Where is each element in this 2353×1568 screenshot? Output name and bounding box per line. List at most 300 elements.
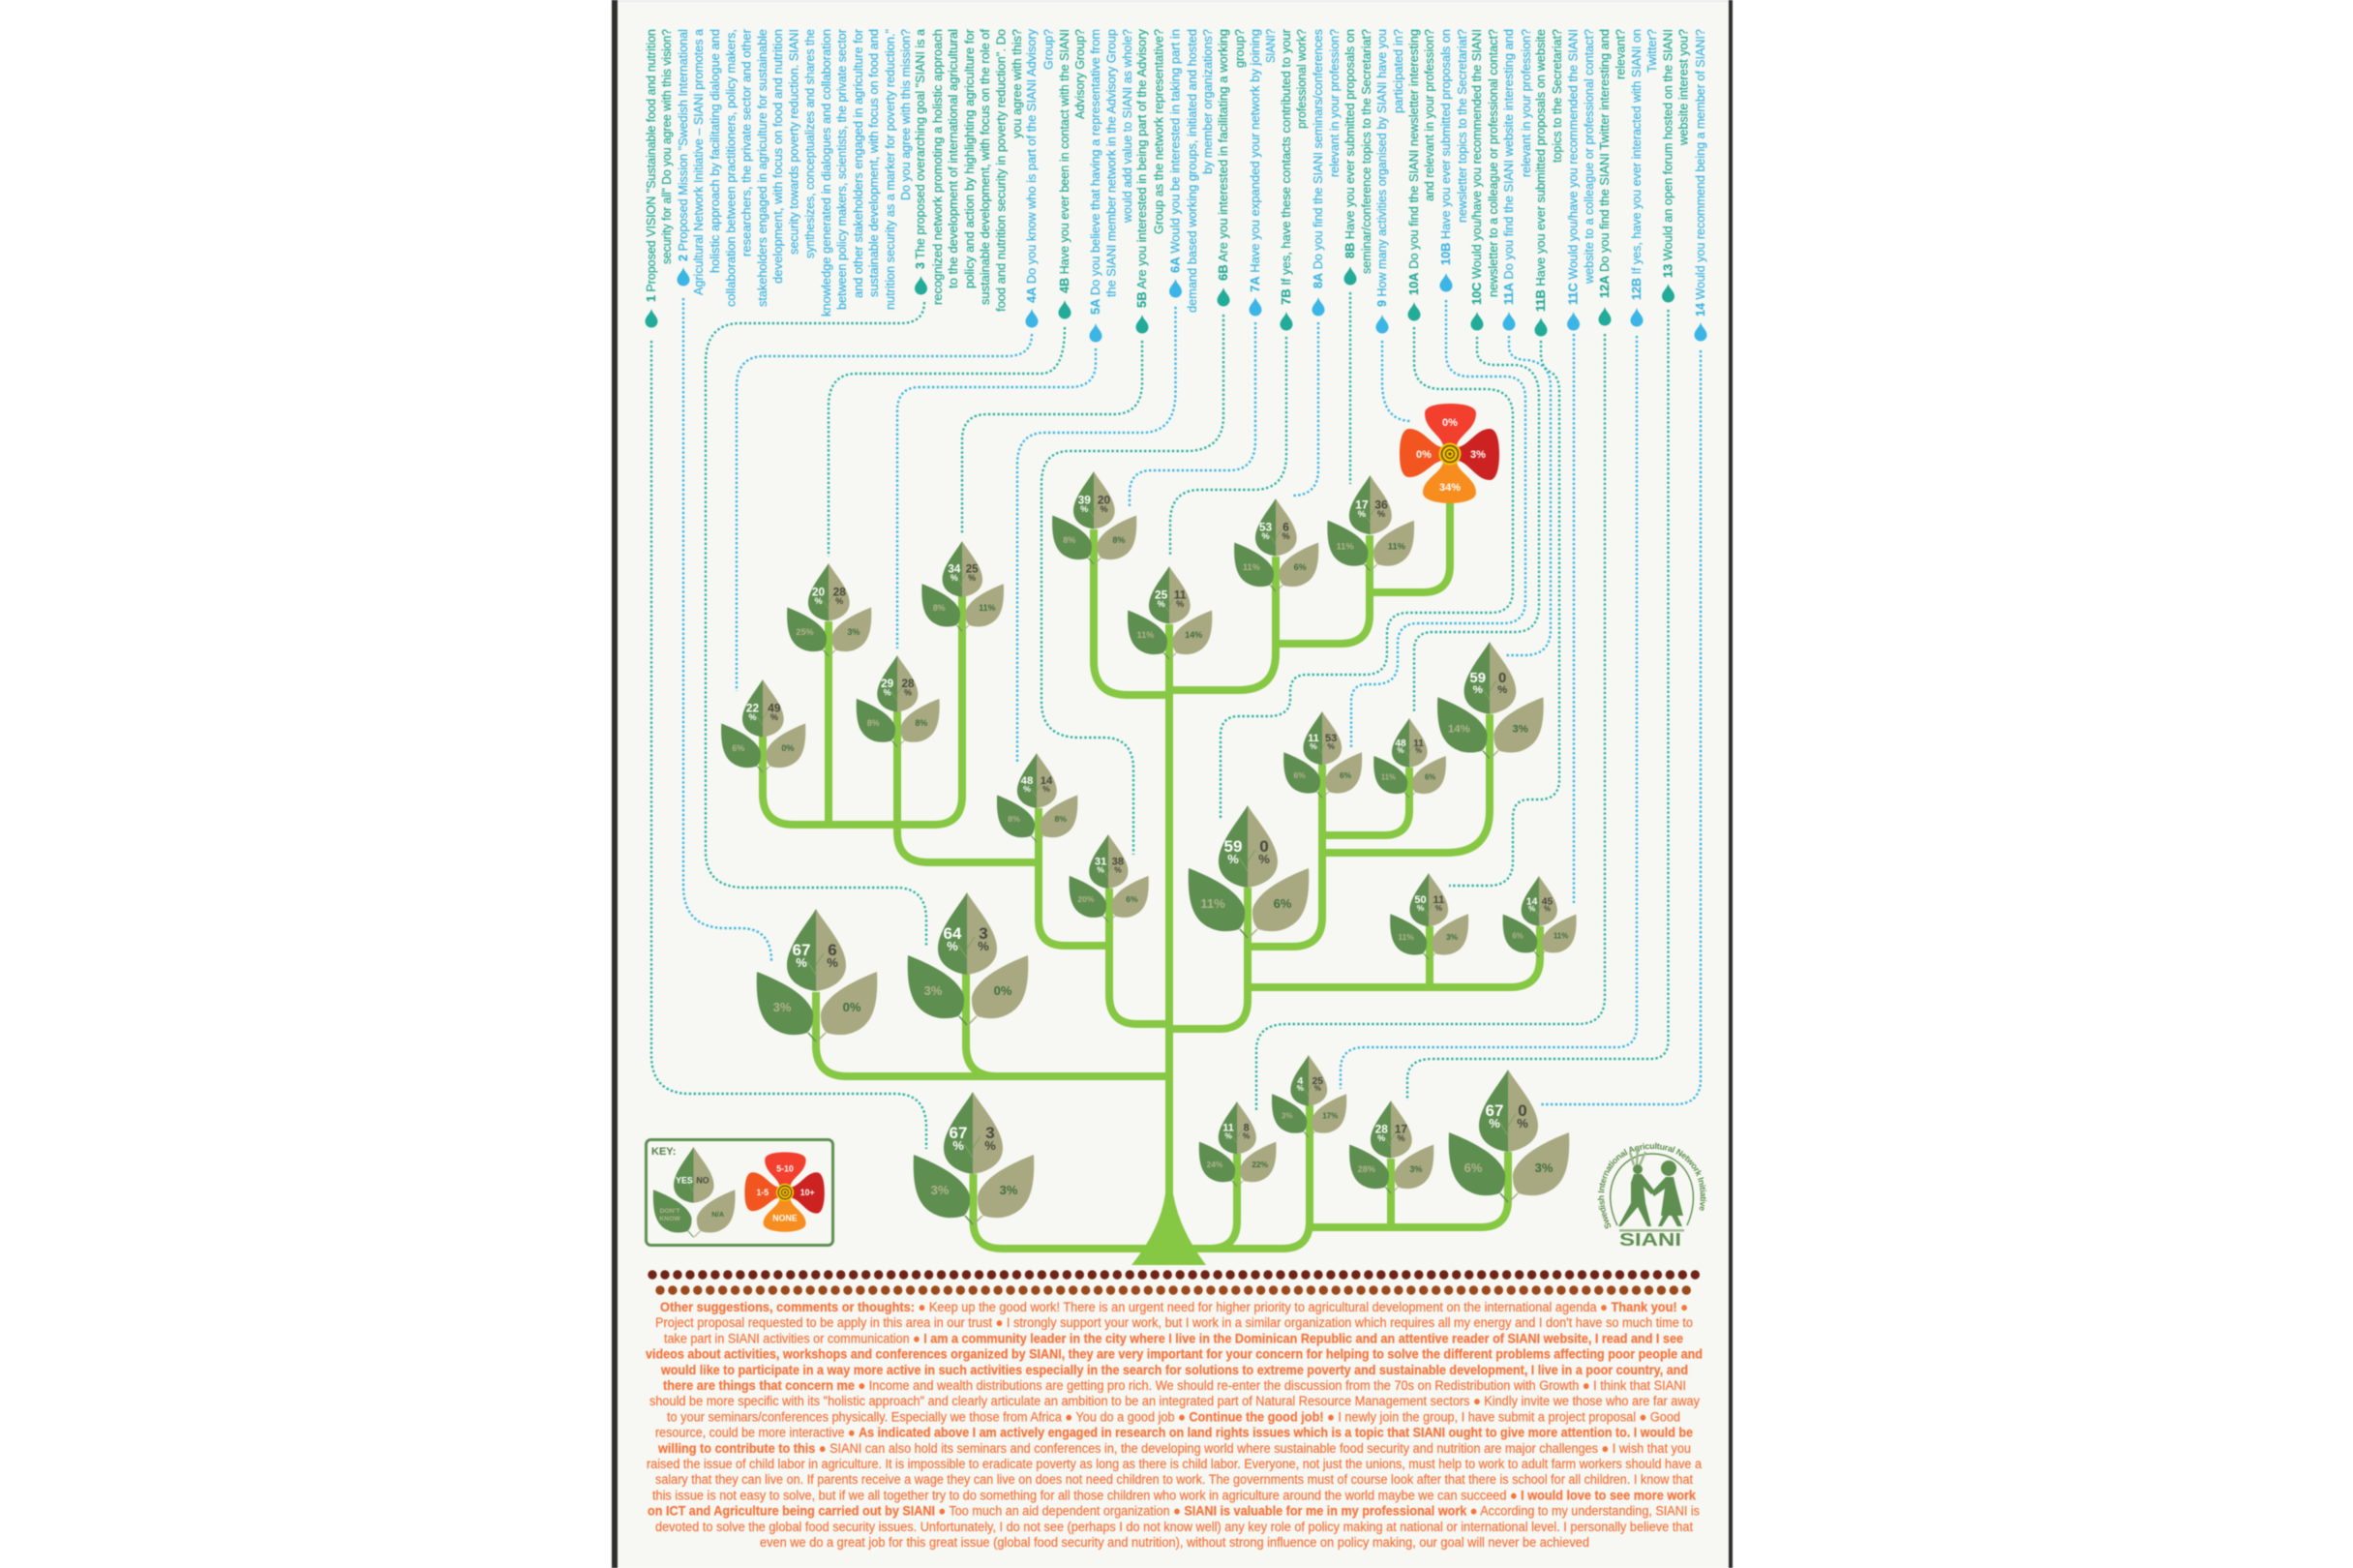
comments text block: raised the issue of child labor in agriculture. It is impossible to eradicate poverty as long as there is child labor. Everyone, not just the unions, must help to work to adult farm workers should have a [647, 1457, 1702, 1471]
question 3: food and nutrition security in poverty reduction". Do [993, 29, 1009, 312]
plant: question 11A: 3% [1512, 723, 1528, 735]
SIANI logo: SIANI [1619, 1230, 1681, 1250]
comments text block: Other suggestions, comments or thoughts: ● Keep up the good work! There is an urgent need for higher priority to agricultural development on the international agenda ● Thank you! ● [660, 1300, 1688, 1314]
comments text block: Project proposal requested to be apply in this area in our trust ● I strongly support your work, but I work in a similar organization which requires all my energy and I don't have so much time to [655, 1315, 1693, 1330]
plant: question 13: 28 [1375, 1123, 1388, 1136]
question 8A [1311, 29, 1342, 316]
plant: question 7A: 8% [1063, 535, 1075, 545]
question 10B [1438, 29, 1469, 292]
plant: question 8B: % [1377, 509, 1386, 519]
question 6A: by member organizations? [1200, 29, 1215, 174]
plant: question 14: % [1517, 1116, 1528, 1131]
connector: question 2 [683, 298, 771, 961]
plant: question 2 [757, 909, 877, 1041]
plant: question 3: 3 [979, 924, 988, 943]
plant: question 6A [997, 753, 1077, 842]
key leaf: NO [696, 1175, 709, 1185]
question 5A: the SIANI member network in the Advisory Group [1103, 29, 1119, 297]
plant: question 10B [1283, 711, 1362, 798]
plant: question 4A: % [770, 712, 778, 722]
plant: question 4A: 0% [781, 743, 794, 753]
connector: question 10A [1221, 327, 1513, 820]
question 6B [1216, 29, 1247, 306]
plant: question 12B: 3% [1282, 1112, 1293, 1121]
plant: question 12A: % [1224, 1131, 1232, 1140]
plant: question 8B: 11% [1336, 541, 1354, 551]
plant: question 3: 64 [944, 924, 962, 943]
key legend: KEY: [651, 1146, 676, 1158]
comments text block: would like to participate in a way more active in such activities especially in the search for solutions to extreme poverty and sustainable development, I live in a poor country, and [660, 1363, 1688, 1377]
comments text block: take part in SIANI activities or communication ● I am a community leader in the city where I live in the Dominican Republic and an attentive reader of SIANI website, I read and I see [664, 1331, 1683, 1345]
connector: question 5B [962, 341, 1142, 534]
plant: question 10A: % [1227, 852, 1239, 866]
question 3 [913, 28, 1024, 312]
plant: question 6B: % [1114, 865, 1122, 875]
question 10C: newsletter to a colleague or professional contact? [1486, 29, 1500, 297]
plant: question 2: % [796, 955, 807, 970]
plant: question 14: 67 [1486, 1101, 1503, 1120]
key legend [647, 1140, 832, 1245]
plant: question 11B: 3% [1446, 932, 1459, 942]
plant: question 12A: 22% [1252, 1160, 1269, 1169]
key flower: 5-10 [776, 1163, 794, 1173]
question 9: participated in? [1391, 29, 1405, 113]
plant: question 8A: 6 [1282, 521, 1289, 534]
plant: question 12A: 11 [1222, 1123, 1234, 1134]
plant: question 10C: 11 [1413, 739, 1424, 749]
plant: question 5B: 11% [979, 603, 996, 613]
plant: question 4A: 49 [768, 702, 781, 715]
question 12B [1629, 29, 1659, 327]
question 11B: topics to the Secretariat? [1550, 29, 1564, 163]
plant: question 11A: 59 [1469, 670, 1486, 686]
question 3: 3 The proposed overarching goal "SIANI is a [913, 28, 927, 269]
plant: question 5A: 8% [867, 718, 880, 728]
question 7B: 7B If yes, have these contacts contributed to your [1279, 28, 1293, 305]
question 11A: 11A Do you find the SIANI website interesting and [1501, 29, 1516, 305]
question 5B: Group as the network representative? [1152, 29, 1165, 234]
question 9: 9 How many activities organised by SIANI have you [1374, 29, 1389, 307]
key leaf: N/A [711, 1210, 725, 1219]
connector: question 7B [1170, 337, 1286, 555]
plant: question 5A: 29 [881, 678, 894, 690]
question 5A: would add value to SIANI as whole? [1120, 29, 1134, 224]
plant: question 11A: 0 [1498, 670, 1506, 686]
plant: question 5B: % [950, 573, 958, 583]
question 12A: 12A Do you find the SIANI Twitter interesting and [1597, 29, 1612, 298]
plant: question 10A: 0 [1259, 837, 1269, 856]
question 14: 14 Would you recommend being a member of SIANI? [1693, 29, 1707, 317]
connector: question 3 [706, 302, 926, 946]
question 13 [1661, 29, 1691, 302]
comments text block [646, 1300, 1703, 1550]
comments text block: resource, could be more interactive ● As indicated above I am actively engaged in research on land rights issues which is a topic that SIANI ought to give more attention to. I would be [655, 1426, 1693, 1440]
plant: question 8A: 11% [1243, 562, 1260, 572]
plant: question 10B: 53 [1325, 733, 1337, 744]
plant: question 6A: 48 [1021, 775, 1033, 787]
question 4A: 4A Do you know who is part of the SIANI Advisory [1024, 29, 1039, 303]
comments text block: on ICT and Agriculture being carried out by SIANI ● Too much an aid dependent organization ● SIANI is valuable for me in my professional work ● According to my understanding, SIANI is [648, 1504, 1700, 1519]
question 3: to the development of international agricultural [946, 29, 960, 288]
flower: question 9: 0% [1442, 417, 1458, 429]
plant: question 7A: % [1100, 504, 1108, 514]
plant: question 3: % [978, 939, 989, 953]
connector: question 10C [1414, 337, 1539, 713]
plant: question 10B: 6% [1340, 770, 1352, 780]
question 2: between policy makers, scientists, the private sector [834, 28, 849, 310]
plant: question 1: 67 [950, 1124, 967, 1142]
question 11B [1533, 29, 1564, 337]
flower: question 9: 34% [1439, 482, 1461, 494]
question 8B: 8B Have you ever submitted proposals on [1342, 29, 1357, 258]
plant: question 5B: % [968, 573, 976, 583]
question 2: and other stakeholders engaged in agriculture for [851, 28, 865, 298]
plant: question 8A: % [1282, 531, 1290, 541]
connector: question 1 [651, 341, 926, 1149]
plant: question 10C: % [1398, 746, 1404, 755]
plant: question 4B: 3% [847, 627, 860, 637]
plant: question 12B [1272, 1055, 1346, 1137]
comments text block: even we do a great job for this great issue (global food security and nutrition), without strong influence on policy making, our goal will never be achieved [760, 1535, 1589, 1550]
plant: question 10B: % [1327, 741, 1335, 751]
plant: question 12B: % [1314, 1084, 1321, 1093]
question 3: sustainable development, with focus on the role of [978, 29, 992, 305]
key leaf: DON'T [660, 1208, 680, 1215]
plant: question 5A: % [904, 687, 912, 697]
question 5A [1088, 29, 1134, 343]
comments text block: this issue is not easy to solve, but if we all together try to do something for all those children who work in agriculture around the world maybe we can succeed ● I would love to see more work [652, 1488, 1696, 1502]
plant: question 10C: 11% [1381, 773, 1396, 782]
plant: question 13: 28% [1358, 1164, 1375, 1174]
comments text block: devoted to solve the global food security issues. Unfortunately, I do not see (perhaps I do not know well) any key role of policy making at national or international level. I personally believe that [655, 1520, 1693, 1534]
plant: question 8B: 36 [1374, 498, 1388, 512]
connector: question 10B [1351, 300, 1525, 747]
question 2: sustainable development, with focus on food and [866, 29, 881, 297]
plant: question 2: 0% [843, 1000, 861, 1014]
key flower [744, 1152, 825, 1232]
plant: question 11C [1503, 876, 1577, 957]
plant: question 3 [908, 892, 1028, 1025]
question 6B: 6B Are you interested in facilitating a working [1216, 29, 1230, 281]
question 4B: Advisory Group? [1072, 29, 1087, 119]
plant: question 10C: 48 [1395, 739, 1406, 749]
plant: question 10B: 11 [1308, 733, 1319, 744]
question 7B [1279, 28, 1309, 331]
key flower: 1-5 [756, 1188, 769, 1197]
plant: question 4B: 20 [812, 586, 825, 599]
question 2: knowledge generated in dialogues and collaboration [819, 29, 833, 317]
plant: question 6B: 6% [1126, 894, 1138, 904]
plant: question 4A: 6% [732, 743, 744, 753]
dotted divider rows [652, 1275, 1696, 1290]
question 4A [1024, 29, 1055, 327]
plant: question 1: % [984, 1138, 996, 1153]
plant: question 7A [1052, 471, 1136, 564]
connector: question 8B [1349, 292, 1351, 484]
plant: question 1 [914, 1092, 1034, 1224]
plant: question 5A: 28 [902, 678, 915, 690]
question 7A: SIANI? [1263, 29, 1278, 63]
connector: question 6B [1041, 315, 1223, 855]
plant: question 3: 0% [994, 983, 1012, 998]
question 2: collaboration between practitioners, policy makers, [724, 29, 738, 307]
connector: question 11C [1573, 334, 1575, 903]
plant: question 11B: % [1417, 903, 1425, 913]
question 11A [1501, 29, 1533, 331]
plant: question 7A: 39 [1078, 494, 1091, 507]
plant: question 11C: % [1528, 905, 1535, 914]
plant: question 13: 17 [1395, 1123, 1407, 1136]
question 2: researchers, the private sector and other [739, 28, 753, 256]
question 10B: 10B Have you ever submitted proposals on [1438, 29, 1453, 265]
key flower: NONE [772, 1214, 798, 1223]
question 12B: 12B If yes, have you ever interacted with SIANI on [1629, 29, 1644, 300]
plant: question 10C [1373, 718, 1446, 798]
question 2: 2 Proposed Mission "Swedish International [676, 29, 690, 261]
plant: question 7A: 20 [1098, 494, 1110, 507]
question 11B: 11B Have you ever submitted proposals on website [1533, 29, 1548, 312]
plant: question 1: 3% [931, 1183, 950, 1197]
plant: question 4B: % [835, 596, 843, 606]
comments text block: there are things that concern me ● Income and wealth distributions are getting pro rich. We should re-enter the discussion from the 70s on Redistribution with Growth ● I think that SIANI [663, 1378, 1686, 1393]
plant: question 2: % [827, 955, 838, 970]
plant: question 6A: 8% [1054, 814, 1067, 824]
connector: question 4A [737, 334, 1032, 691]
plant: question 10B: 6% [1293, 770, 1306, 780]
question 4B: 4B Have you ever been in contact with the SIANI [1057, 29, 1071, 293]
comments text block: to your seminars/conferences physically. Especially we those from Africa ● You do a good job ● Continue the good job! ● I newly join the group, I have submit a project proposal ● Good [667, 1409, 1680, 1424]
plant: question 6A: 8% [1008, 814, 1020, 824]
question 10C [1469, 29, 1500, 331]
plant: question 7B: % [1158, 599, 1165, 609]
question 6A: demand based working groups, initiated and hosted [1185, 29, 1199, 313]
plant: question 5B [921, 541, 1004, 631]
questions column [644, 28, 1707, 343]
plant: question 5B: 8% [933, 603, 946, 613]
question 2: security towards poverty reduction. SIANI [786, 29, 801, 255]
plant: question 14: % [1489, 1116, 1500, 1131]
plant: question 8B [1327, 475, 1414, 571]
plant: question 12B: 25 [1312, 1075, 1323, 1087]
plant: question 11A: % [1473, 684, 1483, 696]
plant: question 11C: 6% [1512, 932, 1523, 941]
plant: question 8A: % [1261, 531, 1270, 541]
question 5B: 5B Are you interested in being part of the Advisory [1134, 29, 1149, 308]
plant: question 11A: % [1497, 684, 1507, 696]
question 6B: group? [1232, 29, 1247, 68]
plant: question 12B: % [1297, 1084, 1304, 1093]
connector: question 5A [897, 348, 1096, 648]
plant: question 12A: % [1243, 1131, 1251, 1140]
question 2: nutrition security as a marker for poverty reduction." [883, 29, 897, 310]
comments text block: videos about activities, workshops and conferences organized by SIANI, they are very important for your concern for helping to solve the different problems affecting poor people and [646, 1347, 1703, 1362]
plant: question 3: 3% [924, 983, 943, 998]
plant: question 1: 3% [1000, 1183, 1018, 1197]
plant: question 2: 3% [773, 1000, 792, 1014]
question 3: you agree with this? [1010, 29, 1024, 138]
plant: question 7B: % [1176, 599, 1184, 609]
question 8B [1342, 29, 1373, 285]
flower: question 9: 3% [1470, 449, 1486, 461]
plant: question 4B: 25% [796, 627, 814, 637]
connector: question 4B [829, 327, 1065, 557]
plant: question 4B: % [814, 596, 823, 606]
connector: question 11A [1505, 336, 1551, 655]
plant: question 13: 3% [1409, 1164, 1422, 1174]
plant: question 12A [1199, 1101, 1276, 1187]
plant: question 2: 6 [828, 941, 837, 959]
plant: question 11B: 11% [1398, 932, 1414, 942]
plant: question 6B: % [1097, 865, 1104, 875]
tree trunk and branches [763, 503, 1540, 1265]
plant: question 8A: 6% [1294, 562, 1307, 572]
plant: question 6B: 20% [1077, 894, 1095, 904]
question 2: Do you agree with this mission? [898, 29, 913, 200]
plant: question 13 [1349, 1101, 1433, 1193]
question 1 [644, 29, 674, 327]
question 8A: 8A Do you find the SIANI seminars/conferences [1311, 29, 1325, 288]
question 11A: relevant in your profession? [1519, 29, 1533, 177]
question 3: policy and action by highlighting agriculture for [962, 28, 977, 288]
plant: question 10A: 59 [1224, 837, 1242, 856]
plant: question 14: 0 [1518, 1101, 1527, 1120]
question 1: 1 Proposed VISION "Sustainable food and nutrition [644, 29, 658, 302]
question 9 [1374, 29, 1405, 333]
plant: question 6B [1070, 834, 1149, 921]
question 2: Agricultural Network Initiative – SIANI promotes a [691, 28, 706, 295]
plant: question 11B: 50 [1414, 894, 1427, 906]
plant: question 11B: 11 [1433, 894, 1444, 906]
plant: question 10C: % [1415, 746, 1422, 755]
comments text block: salary that they can live on. If parents receive a wage they can live on does not need children to work. The governments must of course look after that there is school for all children. I know that [655, 1472, 1693, 1487]
question 7A [1248, 29, 1278, 316]
question 7B: professional work? [1294, 29, 1309, 129]
plant: question 4A: 22 [746, 702, 759, 715]
plant: question 7A: 8% [1112, 535, 1125, 545]
question 11C [1566, 29, 1596, 331]
connector: question 12B [1341, 336, 1637, 1089]
connector: question 12A [1256, 334, 1605, 1111]
plant: question 10A: 6% [1274, 896, 1292, 911]
question 13: website interest you? [1676, 29, 1691, 146]
plant: question 11A [1437, 642, 1544, 759]
plant: question 11C: % [1544, 905, 1551, 914]
plant: question 5B: 25 [966, 564, 979, 576]
plant: question 7B: 11 [1174, 588, 1187, 602]
key leaf: KNOW [659, 1216, 680, 1222]
connector: question 13 [1407, 310, 1669, 1101]
plant: question 14 [1449, 1070, 1569, 1202]
question 11C: website to a colleague or professional contact? [1582, 29, 1596, 285]
question 4B [1057, 29, 1087, 319]
plant: question 14: 3% [1535, 1161, 1554, 1175]
connector: question 11B [1449, 341, 1559, 886]
plant: question 8B: 11% [1388, 541, 1406, 551]
plant: question 11A: 14% [1448, 723, 1470, 735]
plant: question 8B: % [1358, 509, 1367, 519]
connector: question 8A [1292, 322, 1318, 496]
comments text block: should be more specific with its "holistic approach" and clearly articulate an ambition to be an integrated part of Natural Resource Management sectors ● Kindly invite we those who are far away [649, 1394, 1700, 1408]
plant: question 12B: 4 [1297, 1075, 1303, 1087]
plant: question 10A: % [1258, 852, 1270, 866]
plant: question 2: 67 [793, 941, 810, 959]
plant: question 1: 3 [985, 1124, 995, 1142]
plant: question 10C: 6% [1425, 773, 1435, 782]
question 3: recognized network promoting a holistic approach [930, 29, 945, 305]
plant: question 4A [721, 679, 805, 772]
question 6A: 6A Would you be interested in taking part in [1167, 29, 1183, 273]
question 13: 13 Would an open forum hosted on the SIANI [1661, 29, 1674, 278]
plant: question 12B: 17% [1322, 1112, 1338, 1121]
plant: question 3: % [947, 939, 958, 953]
plant: question 5B: 34 [948, 564, 961, 576]
connector: question 14 [1541, 350, 1701, 1104]
plant: question 6B: 38 [1112, 857, 1124, 868]
question 5A: 5A Do you believe that having a representative from [1088, 29, 1102, 315]
plant: question 4B: 28 [833, 586, 846, 599]
plant: question 11C: 11% [1554, 932, 1568, 941]
plant: question 7A: % [1080, 504, 1088, 514]
plant: question 8A: 53 [1259, 521, 1272, 534]
question 12A [1597, 29, 1628, 325]
plant: question 11B [1390, 873, 1468, 959]
question 8A: relevant in your profession? [1327, 29, 1342, 177]
plant: question 7B [1128, 566, 1212, 659]
question 10B: newsletter topics to the Secretariat? [1455, 29, 1469, 223]
plant: question 7B: 14% [1185, 630, 1202, 640]
question 10A: and relevant in your profession? [1422, 29, 1436, 201]
plant: question 6A: % [1042, 784, 1050, 794]
question 6A [1167, 29, 1215, 313]
question 10C: 10C Would you/have you recommended the SIANI [1469, 29, 1484, 305]
plant: question 8B: 17 [1355, 498, 1369, 512]
question 10A [1406, 29, 1436, 321]
plant: question 13: % [1377, 1133, 1385, 1143]
question 12B: Twitter? [1644, 29, 1659, 73]
question 11C: 11C Would you/have you recommended the SIANI [1566, 29, 1581, 305]
plant: question 11B: % [1435, 903, 1443, 913]
plant: question 1: % [952, 1138, 964, 1153]
plant: question 6A: % [1023, 784, 1031, 794]
plant: question 12A: 8 [1244, 1123, 1250, 1134]
connector: question 6A [1017, 307, 1175, 762]
plant: question 7B: 25 [1155, 588, 1168, 602]
plant: question 14: 6% [1464, 1161, 1483, 1175]
plant: question 11C: 45 [1542, 896, 1554, 907]
connector: question 9 [1382, 341, 1411, 421]
question 10A: 10A Do you find the SIANI newsletter interesting [1406, 29, 1421, 295]
flower: question 9 [1400, 404, 1499, 503]
page card [612, 0, 1733, 1568]
question 7A: 7A Have you expanded your network by joining [1248, 29, 1262, 292]
plant: question 10A: 11% [1200, 896, 1225, 911]
question 12A: relevant? [1613, 29, 1628, 79]
plant: question 10A [1189, 805, 1309, 938]
plant: question 5A: 8% [915, 718, 927, 728]
plant: question 5A: % [884, 687, 891, 697]
flower: question 9: 0% [1416, 449, 1432, 461]
comments text block: willing to contribute to this ● SIANI can also hold its seminars and conferences in, the developing world where sustainable food security and nutrition are major challenges ● I wish that you [657, 1441, 1691, 1456]
plant: question 5A [857, 655, 940, 747]
plant: question 11C: 14 [1526, 896, 1538, 907]
plant: question 7B: 11% [1137, 630, 1154, 640]
question 1: security for all" Do you agree with this vision? [659, 29, 674, 264]
question 2: development, with focus on food and nutrition [770, 29, 785, 284]
key leaf [653, 1147, 736, 1237]
question 5B [1134, 29, 1165, 333]
plant: question 8A [1234, 498, 1318, 591]
key leaf: YES [676, 1175, 693, 1185]
